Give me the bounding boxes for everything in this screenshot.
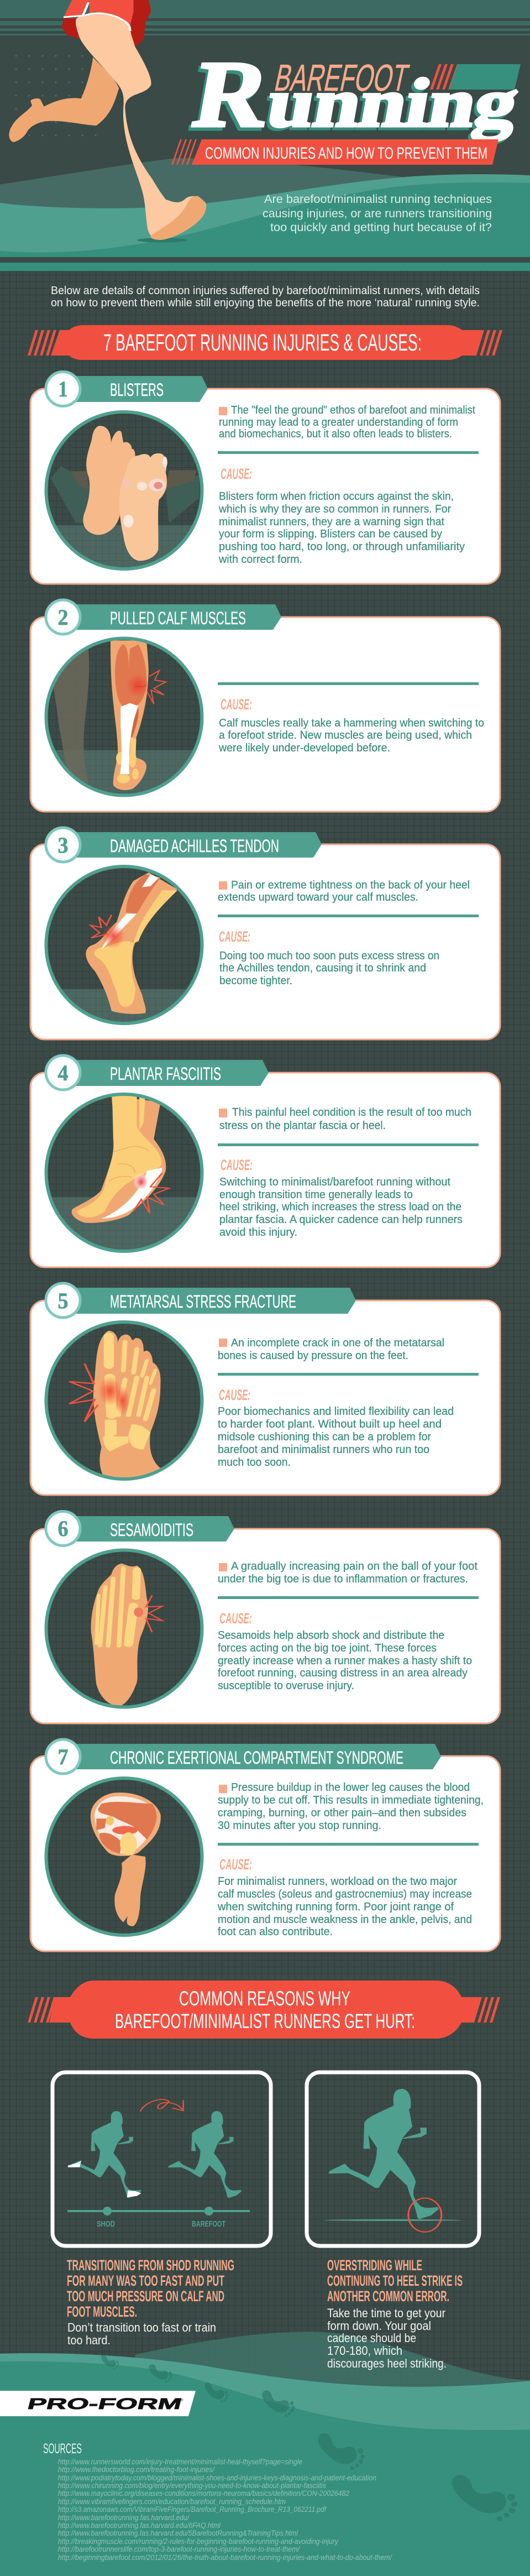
- cause text: greatly increase when a runner makes a hasty shift to: [218, 1655, 472, 1667]
- title: running: R: [186, 42, 278, 147]
- header band: [75, 376, 208, 402]
- cause text: plantar fascia. A quicker cadence can help runners: [219, 1214, 463, 1226]
- reason 1 text: Don’t transition too fast or train: [67, 2321, 216, 2334]
- symptom text: Pressure buildup in the lower leg causes the blood: [231, 1781, 470, 1794]
- reason 2 text: Take the time to get your: [327, 2306, 445, 2320]
- title: running: R: [183, 45, 275, 150]
- intro paragraph: Below are details of common injuries suffered by barefoot/mimimalist runners, with details: [51, 285, 480, 297]
- decorative stripes and teal bar: [430, 64, 521, 90]
- cause text: become tighter.: [219, 975, 292, 987]
- cause text: which is why they are so common in runners. For: [218, 503, 451, 515]
- cause text: [218, 1629, 472, 1692]
- logo: pro-form: ®: [181, 2399, 183, 2402]
- reason 2 text: 170-180, which: [327, 2344, 402, 2358]
- symptom text: and biomechanics, but it also often leads to blisters.: [219, 428, 452, 440]
- panel: 7 chronic exertional compartment syndrome: [30, 1739, 500, 1951]
- number badge: 4: [57, 1060, 69, 1085]
- symptom text: stress on the plantar fascia or heel.: [219, 1120, 386, 1132]
- sources list: http://www.vibramfivefingers.com/education/barefoot_running_schedule.htm: [58, 2497, 286, 2506]
- header band: [75, 832, 322, 858]
- header band: METATARSAL STRESS FRACTURE: [110, 1292, 296, 1311]
- bottom waves: [0, 2332, 530, 2576]
- header band: PULLED CALF MUSCLES: [110, 608, 246, 628]
- cause text: Poor biomechanics and limited flexibility can lead: [218, 1405, 454, 1418]
- cause text: foot can also contribute.: [218, 1926, 333, 1938]
- symptom text: under the big toe is due to inflammation or fractures.: [218, 1573, 468, 1585]
- symptom text: bones is caused by pressure on the feet.: [218, 1350, 408, 1362]
- cause text: motion and muscle weakness in the ankle, pelvis, and: [218, 1914, 472, 1926]
- panel: 6 sesamoiditis: [30, 1512, 500, 1723]
- cause text: [218, 717, 484, 754]
- symptom text: This painful heel condition is the result of too much: [232, 1106, 471, 1119]
- curved arrow: [140, 2099, 183, 2112]
- cause text: enough transition time generally leads to: [219, 1189, 413, 1201]
- header band: [75, 1060, 269, 1086]
- cause text: For minimalist runners, workload on the two major: [218, 1875, 457, 1888]
- cause text: [217, 1875, 472, 1938]
- cause text: the Achilles tendon, causing it to shrink and: [219, 962, 426, 974]
- sources list: http://www.chirunning.com/blog/entry/everything-you-need-to-know-about-plantar-fasciitis: [58, 2481, 326, 2490]
- section banner: 7 injuries: [28, 325, 502, 360]
- reason 1 text: TOO MUCH PRESSURE ON CALF AND: [67, 2288, 224, 2305]
- cause text: [218, 490, 465, 566]
- footprints: [101, 2355, 517, 2521]
- number badge: 1: [59, 377, 67, 401]
- intro question: too quickly and getting hurt because of it?: [270, 221, 492, 234]
- symptom text: cramping, burning, or other pain–and then subsides: [218, 1807, 466, 1819]
- symptom text: supply to be cut off. This results in immediate tightening,: [218, 1794, 484, 1806]
- intro question: causing injuries, or are runners transitioning: [263, 207, 492, 220]
- big runner: [324, 2089, 461, 2232]
- cause label: CAUSE:: [219, 1387, 250, 1403]
- sources list: http://barefootrunnerslife.com/top-3-barefoot-running-injuries-how-to-treat-them/: [58, 2545, 300, 2553]
- reason 1 text: TRANSITIONING FROM SHOD RUNNING: [67, 2257, 234, 2274]
- reason 2 text: cadence should be: [327, 2331, 416, 2345]
- cause text: Switching to minimalist/barefoot running without: [219, 1176, 450, 1188]
- reason 1 text: [67, 2257, 234, 2347]
- panel: 3 damaged achilles tendon: [30, 828, 500, 1039]
- cause text: susceptible to overuse injury.: [218, 1680, 354, 1692]
- number badge: 7: [57, 1744, 69, 1769]
- runners shod and barefoot: [67, 2111, 242, 2198]
- reason 2 text: form down. Your goal: [327, 2319, 431, 2333]
- symptom text: The "feel the ground" ethos of barefoot and minimalist: [231, 404, 475, 416]
- timeline: BAREFOOT: [192, 2219, 225, 2229]
- bottom hero bands: [0, 257, 530, 271]
- number badge: [46, 372, 80, 406]
- symptom text: running may lead to a greater understanding of form: [219, 416, 458, 429]
- subtitle ribbon: [171, 139, 498, 165]
- sources list: http://www.barefootrunning.fas.harvard.edu/5BarefootRunning&TrainingTips.html: [58, 2529, 298, 2537]
- sources list: http://www.barefootrunning.fas.harvard.edu/6FAQ.html: [58, 2521, 221, 2530]
- cause text: much too soon.: [218, 1456, 291, 1469]
- sources list: http://www.podiatrytoday.com/blogged/minimalist-shoes-and-injuries-keys-diagnosis-and-patient-education: [58, 2474, 376, 2482]
- cause label: CAUSE:: [219, 1610, 252, 1627]
- symptom text: extends upward toward your calf muscles.: [218, 891, 418, 903]
- cause text: Sesamoids help absorb shock and distribute the: [218, 1629, 444, 1642]
- cause text: avoid this injury.: [219, 1226, 297, 1239]
- halftone dots: [6, 44, 102, 138]
- panel: overstriding: [307, 2072, 479, 2246]
- number badge: [46, 1056, 80, 1090]
- number badge: 2: [57, 605, 69, 630]
- symptom text: [218, 1560, 477, 1585]
- title: running: unning: [259, 68, 521, 144]
- number badge: [46, 1283, 80, 1318]
- intro question: Are barefoot/minimalist running techniques: [264, 193, 492, 206]
- illustration: calf muscles: [48, 640, 200, 794]
- sources list: http://beginningbarefoot.com/2012/01/26/the-truth-about-barefoot-running-injuries-and-what-to-do-about-them/: [58, 2553, 392, 2562]
- intro question: [263, 193, 492, 234]
- title: running: [183, 42, 523, 150]
- reason 2 text: OVERSTRIDING WHILE: [327, 2257, 422, 2274]
- reason 2 text: [327, 2257, 463, 2370]
- illustration: leg cross-section: [44, 1776, 204, 1939]
- cause text: heel striking, which increases the stress load on the: [219, 1201, 461, 1213]
- symptom text: An incomplete crack in one of the metatarsal: [231, 1337, 444, 1349]
- cause text: [218, 1405, 454, 1469]
- cause text: [219, 1176, 463, 1239]
- cause text: pushing too hard, too long, or through unfamiliarity: [219, 541, 465, 553]
- sources list: [58, 2458, 392, 2562]
- symptom text: 30 minutes after you stop running.: [218, 1820, 381, 1832]
- logo: pro-form: [0, 2391, 196, 2416]
- number badge: 5: [57, 1288, 69, 1313]
- cause text: Doing too much too soon puts excess stress on: [219, 950, 439, 962]
- header band: PLANTAR FASCIITIS: [110, 1064, 221, 1084]
- title: running: unning: [262, 65, 523, 142]
- reason 2 text: discourages heel striking.: [327, 2356, 447, 2370]
- section banner: common reasons: COMMON REASONS WHY: [179, 1987, 350, 2010]
- number badge: [46, 1739, 80, 1774]
- cause text: minimalist runners, they are a warning sign that: [219, 516, 444, 528]
- panel: 1 blisters: [30, 372, 500, 584]
- header band: [75, 604, 281, 630]
- number badge: [46, 828, 80, 862]
- symptom text: [218, 1781, 484, 1832]
- cause text: barefoot and minimalist runners who run too: [218, 1444, 429, 1456]
- cause text: to harder foot plant. Without built up heel and: [218, 1418, 442, 1430]
- header band: DAMAGED ACHILLES TENDON: [110, 836, 279, 856]
- top racing stripes: [0, 0, 530, 35]
- logo: pro-form: PRO-FORM: [25, 2395, 183, 2413]
- cause label: CAUSE:: [221, 466, 252, 482]
- cause label: CAUSE:: [221, 696, 252, 713]
- number badge: [46, 1512, 80, 1546]
- sources list: http://s3.amazonaws.com/VibramFiveFingers/Barefoot_Running_Brochure_R13_062211.pdf: [58, 2505, 327, 2514]
- sources list: http://breakingmuscle.com/running/2-rules-for-beginning-barefoot-running-and-avoiding-injury: [58, 2537, 339, 2546]
- intro paragraph: on how to prevent them while still enjoying the benefits of the more ‘natural’ running style.: [51, 297, 480, 309]
- timeline: SHOD: [97, 2219, 115, 2229]
- symptom text: A gradually increasing pain on the ball of your foot: [231, 1560, 477, 1572]
- symptom text: [219, 1106, 471, 1132]
- cause text: Blisters form when friction occurs against the skin,: [219, 490, 454, 503]
- cause text: forces acting on the big toe joint. These forces: [218, 1642, 437, 1654]
- cause label: CAUSE:: [219, 1856, 252, 1873]
- symptom text: [219, 404, 475, 440]
- illustration: sesamoid bones: [44, 1548, 204, 1711]
- timeline: [67, 2207, 250, 2229]
- reason 1 text: too hard.: [67, 2333, 111, 2347]
- panel: 4 plantar fasciitis: [30, 1056, 500, 1267]
- cause text: a forefoot stride. New muscles are being used, which: [219, 729, 472, 741]
- cause text: when switching running form. Poor joint range of: [217, 1901, 454, 1913]
- number badge: 6: [57, 1516, 69, 1541]
- sources list: http://www.barefootrunning.fas.harvard.edu/: [58, 2514, 190, 2522]
- cause text: with correct form.: [218, 553, 302, 566]
- illustration: metatarsal fracture: [44, 1320, 204, 1483]
- cause text: were likely under-developed before.: [218, 742, 390, 754]
- illustration: plantar fascia: [48, 1096, 200, 1250]
- sources list: http://www.mayoclinic.org/diseases-conditions/mortons-neuroma/basics/definition/CON-20026482: [58, 2489, 349, 2497]
- cause text: midsole cushioning this can be a problem for: [218, 1431, 431, 1443]
- illustration: running legs: [9, 0, 206, 240]
- illustration: blistered feet: [48, 414, 200, 567]
- symptom text: Pain or extreme tightness on the back of your heel: [231, 879, 470, 891]
- cause label: CAUSE:: [219, 928, 250, 945]
- symptom text: [218, 1337, 444, 1362]
- header band: [75, 1516, 234, 1542]
- cause text: your form is slipping. Blisters can be caused by: [219, 528, 442, 540]
- sources list: http://www.runnersworld.com/injury-treatment/minimalist-heal-thyself?page=single: [58, 2458, 302, 2466]
- ground waves: [0, 158, 530, 258]
- cause text: [219, 950, 439, 987]
- panel: transitioning: [53, 2072, 271, 2246]
- sources heading: SOURCES: [43, 2441, 82, 2457]
- intro paragraph: [51, 285, 480, 309]
- number badge: [46, 600, 80, 634]
- cause text: Calf muscles really take a hammering when switching to: [219, 717, 484, 729]
- header band: BLISTERS: [110, 380, 164, 400]
- panel: 2 pulled calf muscles: [30, 600, 500, 812]
- symptom text: [218, 879, 470, 903]
- reason 1 text: FOOT MUSCLES.: [67, 2303, 137, 2320]
- cause text: calf muscles (soleus and gastrocnemius) may increase: [218, 1888, 472, 1900]
- illustration: achilles tendon: [48, 868, 200, 1022]
- header band: [75, 1288, 356, 1314]
- reason 1 text: FOR MANY WAS TOO FAST AND PUT: [67, 2272, 224, 2289]
- cause text: forefoot running, causing distress in an area already: [218, 1667, 468, 1679]
- header band: [75, 1744, 441, 1769]
- sources list: http://www.thedoctorblog.com/treating-foot-injuries/: [58, 2465, 215, 2474]
- number badge: 3: [57, 833, 69, 858]
- cause label: CAUSE:: [221, 1157, 253, 1173]
- header band: SESAMOIDITIS: [110, 1520, 193, 1540]
- section banner: common reasons: [28, 1981, 500, 2039]
- panel: 5 metatarsal stress fracture: [30, 1283, 500, 1495]
- title: barefoot: BAREFOOT: [271, 57, 412, 99]
- hero section: [0, 0, 530, 271]
